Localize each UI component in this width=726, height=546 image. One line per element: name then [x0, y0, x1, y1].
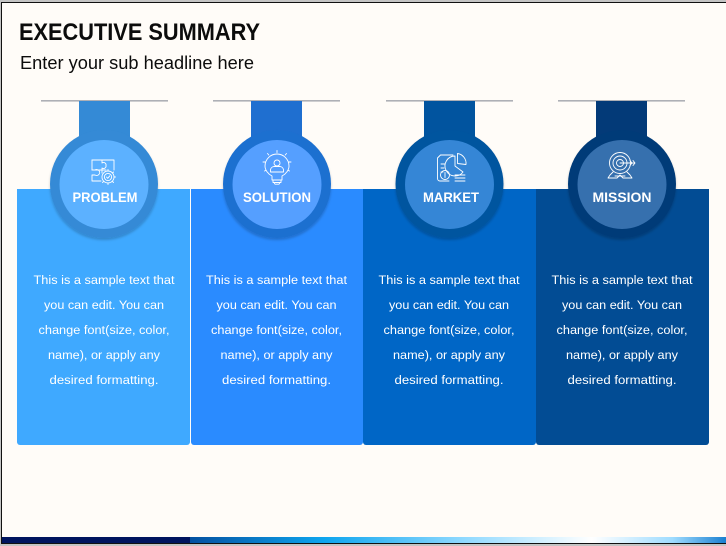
icon: puzzle and gear	[92, 160, 116, 184]
body text: problem: you can edit. You can	[44, 298, 164, 312]
body text: solution: This is a sample text that	[206, 273, 348, 287]
panel: market	[363, 100, 536, 445]
body text: market: name), or apply any	[393, 348, 506, 362]
panel: solution	[191, 100, 363, 445]
label: market: MARKET	[423, 189, 479, 205]
body text: mission: name), or apply any	[566, 348, 679, 362]
icon: light bulb with person	[263, 150, 291, 184]
body text: solution: desired formatting.	[222, 373, 331, 387]
body text: problem: change font(size, color,	[38, 323, 170, 337]
hanging tab: problem	[79, 101, 130, 146]
body text: mission: you can edit. You can	[562, 298, 682, 312]
footer bar	[2, 537, 726, 543]
body text: market: change font(size, color,	[384, 323, 514, 337]
body text: solution	[206, 273, 348, 387]
body text: problem	[34, 273, 175, 387]
badge: solution	[223, 130, 331, 238]
body text: problem: desired formatting.	[50, 373, 158, 387]
badge: mission	[568, 130, 676, 238]
body text: solution: you can edit. You can	[216, 298, 337, 312]
body text: problem: name), or apply any	[48, 348, 161, 362]
panel body: solution	[191, 189, 363, 445]
badge: market	[396, 130, 504, 238]
body text: market	[378, 273, 520, 387]
icon: target with arrow	[608, 152, 635, 178]
body text: solution: change font(size, color,	[211, 323, 342, 337]
panel body: problem	[17, 189, 190, 445]
hanging tab: mission	[596, 101, 647, 146]
body text: mission	[552, 273, 693, 387]
body text: market: desired formatting.	[394, 373, 504, 387]
label: solution: SOLUTION	[243, 189, 311, 205]
body text: problem: This is a sample text that	[34, 273, 175, 287]
label: problem: PROBLEM	[72, 189, 138, 205]
icon: report with pie chart	[438, 154, 466, 181]
body text: mission: change font(size, color,	[556, 323, 688, 337]
title: EXECUTIVE SUMMARY	[19, 19, 260, 46]
hanging tab: market	[424, 101, 475, 146]
badge: problem	[50, 130, 158, 238]
body text: mission: This is a sample text that	[552, 273, 693, 287]
body text: mission: desired formatting.	[568, 373, 676, 387]
panel: mission	[536, 100, 709, 445]
panel: problem	[17, 100, 190, 445]
hanging tab: solution	[251, 101, 302, 146]
panel body: market	[363, 189, 536, 445]
label: mission: MISSION	[592, 189, 652, 205]
body text: solution: name), or apply any	[220, 348, 333, 362]
subtitle: Enter your sub headline here	[20, 52, 254, 73]
body text: market: This is a sample text that	[378, 273, 520, 287]
panel body: mission	[536, 189, 709, 445]
body text: market: you can edit. You can	[389, 298, 509, 312]
